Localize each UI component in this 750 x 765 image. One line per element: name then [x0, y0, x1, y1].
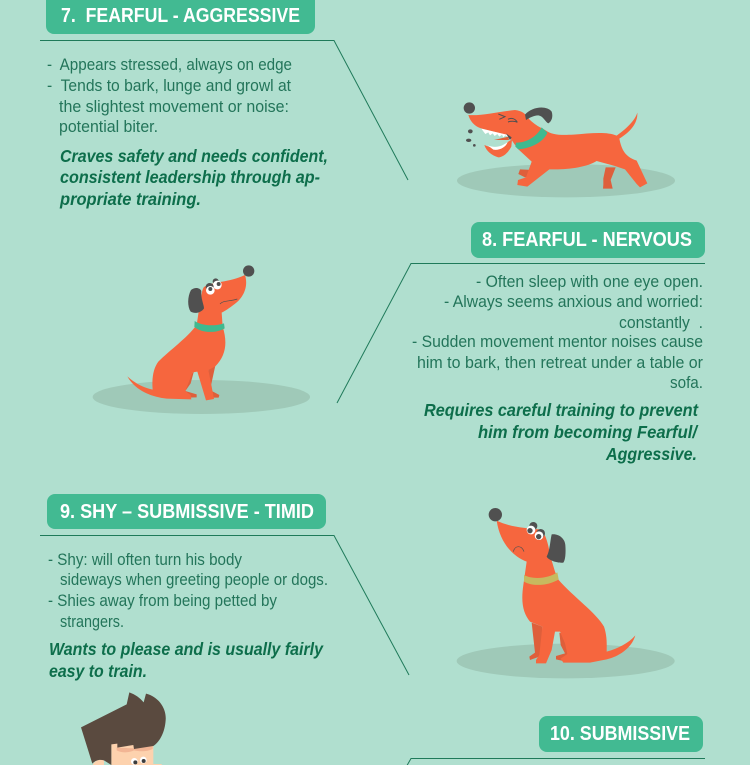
text block: traits: sideways when greeting people or dogs. — [60, 571, 328, 589]
text block: advice: Aggressive. — [605, 444, 697, 464]
heading: 8 fearful nervous — [471, 222, 705, 258]
heading: 7 fearful aggressive — [46, 0, 315, 34]
heading: 10 submissive — [539, 716, 703, 752]
text block: advice — [49, 639, 324, 681]
text block: advice: Wants to please and is usually fairly — [49, 639, 324, 659]
heading: 8 fearful nervous: 8. FEARFUL - NERVOUS — [482, 228, 692, 251]
text block: advice — [424, 400, 699, 464]
text block: traits — [48, 551, 328, 631]
text block: traits: the slightest movement or noise: — [59, 98, 289, 116]
panel: 7 fearful aggressive — [40, 0, 675, 209]
heading: 9 shy submissive timid: 9. SHY – SUBMISSIVE - TIMID — [60, 500, 314, 523]
text block: traits: - Sudden movement mentor noises cause — [412, 333, 703, 351]
heading: 10 submissive: 10. SUBMISSIVE — [550, 722, 690, 745]
text block: traits: him to bark, then retreat under a table or — [417, 354, 703, 372]
text block: traits — [412, 273, 703, 392]
icon: nervous sitting dog — [93, 265, 310, 414]
text block: traits: strangers. — [60, 613, 124, 631]
text block: traits: - Always seems anxious and worried: — [444, 293, 703, 311]
icon: shy sitting dog — [457, 508, 675, 678]
text block: traits: - Tends to bark, lunge and growl at — [47, 77, 291, 95]
text block: traits: - Appears stressed, always on edge — [47, 56, 292, 74]
text block: advice: him from becoming Fearful/ — [478, 422, 699, 442]
text block: traits: - Shy: will often turn his body — [48, 551, 243, 569]
text block: traits: potential biter. — [59, 118, 158, 136]
icon: man with brown hair — [81, 692, 166, 765]
text block: advice: consistent leadership through ap- — [60, 167, 320, 187]
text block: traits: - Shies away from being petted by — [48, 592, 278, 610]
panel: 8 fearful nervous — [93, 222, 705, 464]
heading: 9 shy submissive timid — [47, 494, 326, 529]
text block: advice: easy to train. — [49, 661, 147, 681]
text block: advice: propriate training. — [59, 189, 201, 209]
text block: traits: - Often sleep with one eye open. — [476, 273, 703, 291]
text block: traits: sofa. — [670, 374, 703, 392]
panel: 10 submissive — [81, 692, 705, 765]
panel: 9 shy submissive timid — [40, 494, 675, 681]
text block: traits — [47, 56, 292, 136]
heading: 7 fearful aggressive: 7. FEARFUL - AGGRESSIVE — [61, 4, 300, 27]
text block: advice: Craves safety and needs confident, — [60, 146, 328, 166]
icon: growling dog — [457, 102, 675, 197]
text block: traits: constantly . — [619, 314, 703, 332]
text block: advice: Requires careful training to prevent — [424, 400, 699, 420]
text block: advice — [59, 146, 328, 209]
